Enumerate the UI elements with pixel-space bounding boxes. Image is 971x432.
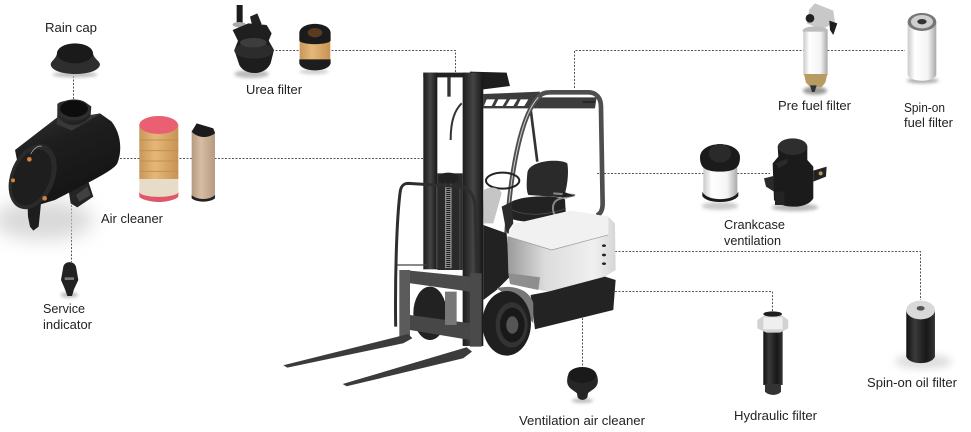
fork carriage xyxy=(396,183,482,347)
label: crankcase ventilation xyxy=(724,218,785,248)
left fork xyxy=(283,334,412,368)
rear tilted overhead guard xyxy=(483,92,603,233)
label: urea filter: Urea filter xyxy=(246,83,302,97)
label: service indicator: indicator xyxy=(43,318,92,332)
icon: spin-on fuel filter xyxy=(907,13,939,83)
forklift xyxy=(283,72,616,386)
label: air cleaner: Air cleaner xyxy=(101,212,163,226)
label: spin-on fuel filter: fuel filter xyxy=(904,116,953,130)
mast xyxy=(423,72,510,346)
label: spin-on oil filter: Spin-on oil filter xyxy=(867,376,957,390)
rear counterweight xyxy=(531,277,616,329)
icon: air cleaner secondary element xyxy=(192,123,215,202)
label: spin-on fuel filter xyxy=(904,101,953,130)
icon: air cleaner housing xyxy=(0,99,120,240)
label: service indicator xyxy=(43,302,92,332)
white counterbalance body xyxy=(507,211,616,292)
label: pre fuel filter: Pre fuel filter xyxy=(778,99,851,113)
steering and seat xyxy=(483,161,575,233)
icon: hydraulic filter xyxy=(757,311,788,395)
right fork xyxy=(343,347,472,386)
label: service indicator: Service xyxy=(43,302,85,316)
label: spin-on fuel filter: Spin-on xyxy=(904,101,945,115)
icon: ventilation air cleaner xyxy=(567,367,598,403)
label: crankcase ventilation: ventilation xyxy=(724,234,781,248)
icon: urea filter cartridge xyxy=(299,24,331,74)
icon: service indicator xyxy=(61,262,78,298)
front body xyxy=(483,225,510,300)
icon: urea filter housing xyxy=(233,5,274,78)
label: hydraulic filter: Hydraulic filter xyxy=(734,409,817,423)
icon: rain cap xyxy=(51,43,100,77)
icon: crankcase cartridge xyxy=(700,144,740,210)
front tire xyxy=(482,287,533,356)
label: ventilation air cleaner: Ventilation air cleaner xyxy=(519,414,645,428)
icon: pre fuel filter xyxy=(803,3,837,95)
icon: spin-on oil filter xyxy=(895,301,952,369)
icon: crankcase housing xyxy=(764,138,827,211)
label: crankcase ventilation: Crankcase xyxy=(724,218,785,232)
dashed connector lines xyxy=(72,50,920,367)
label: rain cap: Rain cap xyxy=(45,21,97,35)
icon: air cleaner primary element xyxy=(139,116,178,202)
